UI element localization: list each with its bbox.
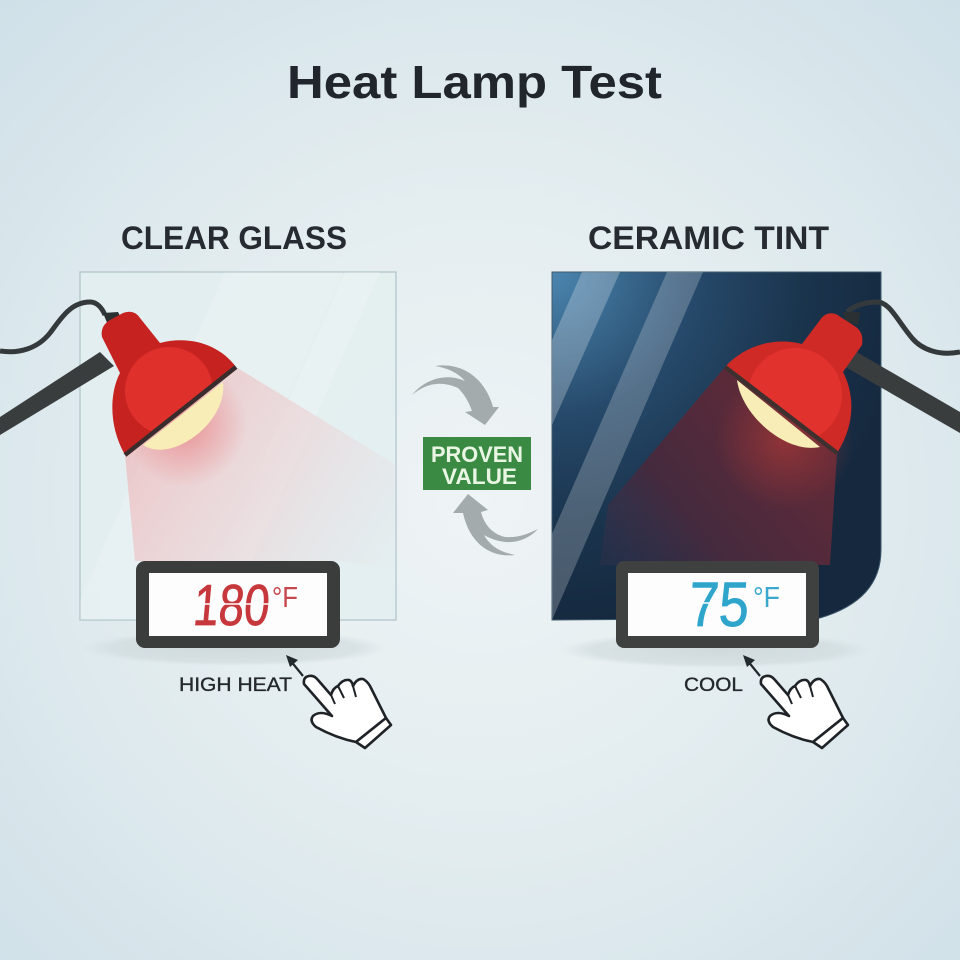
panel: ceramic tint pane — [552, 272, 881, 620]
arrow: curved up to badge — [453, 494, 538, 555]
arrow: curved down to badge — [412, 365, 499, 425]
heading: ceramic tint: CERAMIC TINT — [588, 220, 829, 256]
thermometer display: ceramic tint — [616, 561, 819, 648]
label: cool: COOL — [684, 674, 743, 696]
title: Heat Lamp Test — [287, 56, 662, 108]
table shadow: left — [82, 630, 388, 666]
unit: degrees F: °F — [272, 582, 298, 614]
light beam: clear glass — [123, 363, 396, 570]
light beam: ceramic tint — [600, 367, 855, 565]
heading: clear glass: CLEAR GLASS — [121, 220, 347, 256]
table shadow: right — [559, 632, 871, 668]
label: high heat: HIGH HEAT — [179, 674, 292, 696]
icon: pointing hand and arrow, high heat — [286, 655, 391, 748]
badge: proven value: PROVEN — [431, 442, 523, 467]
icon: lamp left — [0, 302, 236, 455]
reading: 180: 180 — [191, 573, 273, 638]
icon: pointing hand and arrow, cool — [743, 655, 848, 748]
panel: clear glass pane — [80, 272, 396, 620]
thermometer display: clear glass — [136, 561, 340, 648]
unit: degrees F, cool: °F — [753, 582, 780, 614]
reading: 75: 75 — [687, 570, 751, 640]
badge: proven value — [423, 437, 531, 490]
badge: proven value: VALUE — [442, 464, 517, 489]
icon: lamp right — [725, 302, 960, 453]
